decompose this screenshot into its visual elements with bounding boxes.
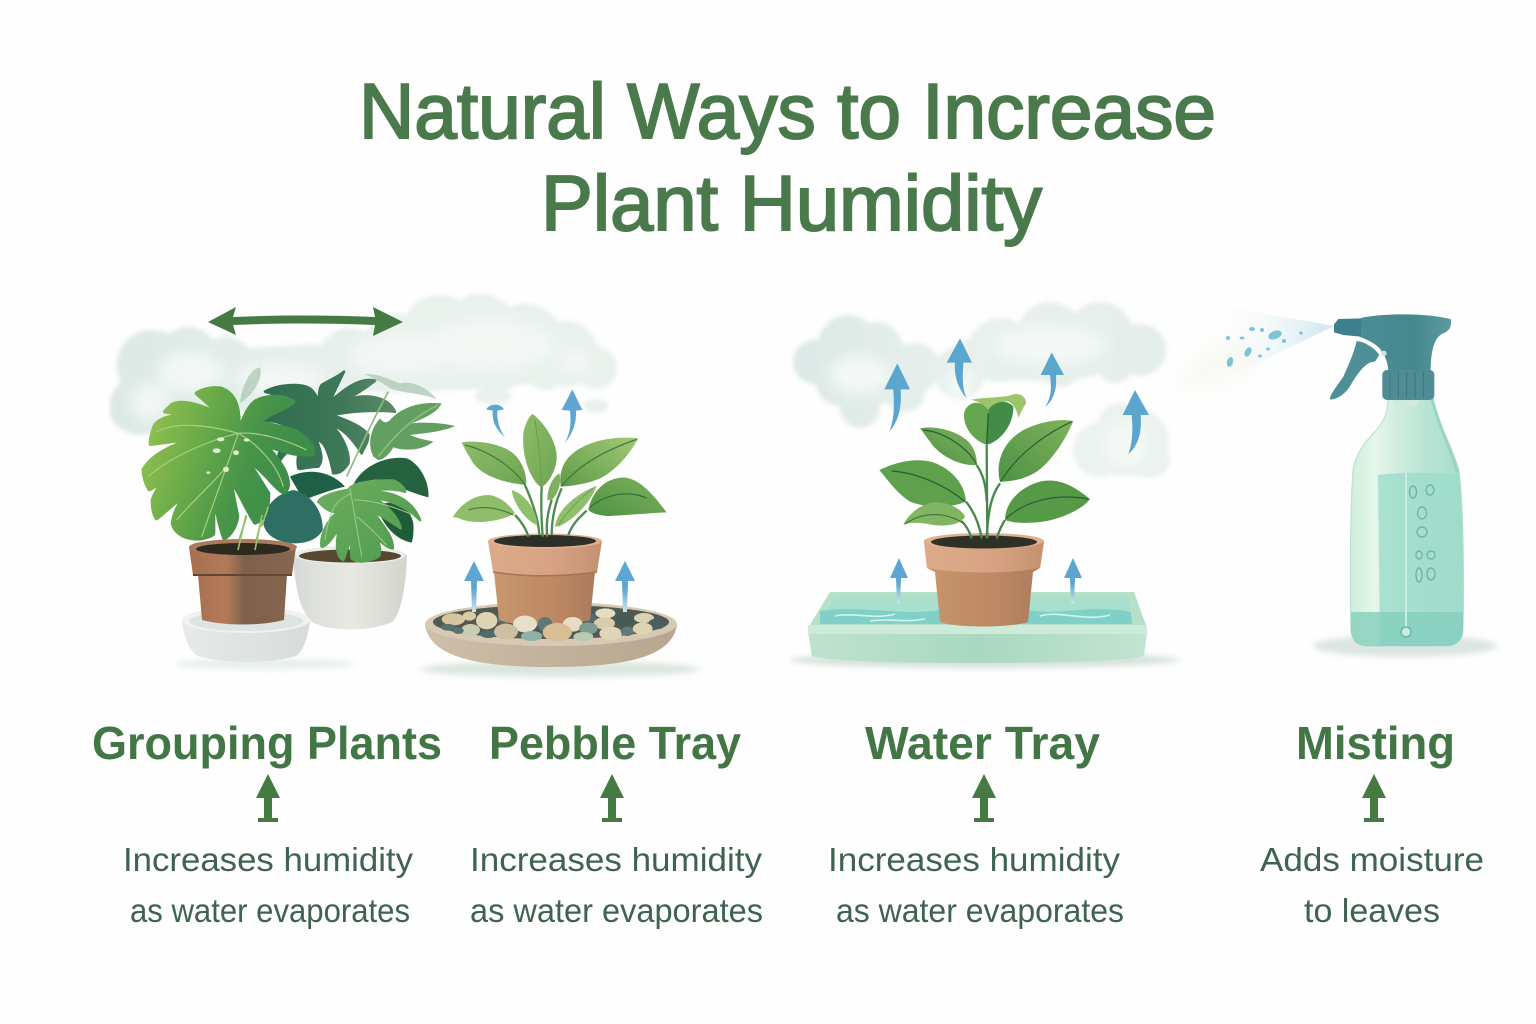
terracotta pot <box>924 533 1044 626</box>
tray <box>808 592 1147 663</box>
double arrow: grouping <box>208 307 403 336</box>
label: pebble tray: Pebble Tray <box>489 717 741 769</box>
label: water tray: Water Tray <box>865 717 1100 769</box>
dark right leaf <box>353 458 429 497</box>
pebble tray setup <box>420 389 700 677</box>
label: water tray: Increases humidity <box>828 841 1121 878</box>
spray bottle <box>1313 314 1497 657</box>
blue arrows above plant <box>884 338 1149 454</box>
cloud: grouping and pebble humidity <box>110 294 617 435</box>
mist haze <box>1180 339 1260 388</box>
bottle body <box>1350 398 1464 646</box>
spray head and trigger <box>1330 314 1451 407</box>
label: misting: Adds moisture <box>1260 841 1484 878</box>
small blue arrows: water tray <box>890 558 1082 604</box>
plant leaves: pebble tray <box>453 414 667 537</box>
title: Natural Ways to Increase <box>359 67 1216 155</box>
pebbles back <box>442 608 665 629</box>
label: misting: to leaves <box>1304 892 1440 929</box>
concrete pot <box>293 546 407 630</box>
faded leaves <box>240 367 437 403</box>
pebbles front <box>441 612 653 642</box>
label: pebble tray: Increases humidity <box>470 841 763 878</box>
small blue arrows: pebble tray <box>464 561 635 612</box>
plant leaves: water tray <box>879 394 1090 538</box>
label: grouping plants: as water evaporates <box>130 892 410 929</box>
label: pebble tray <box>470 717 763 929</box>
label: grouping plants: Grouping Plants <box>92 717 442 769</box>
arrow up <box>972 774 996 822</box>
cloud: water tray humidity <box>793 302 1170 478</box>
teal round leaf <box>263 490 323 543</box>
back monstera leaf <box>262 372 395 473</box>
big monstera leaf <box>143 388 313 545</box>
arrow up <box>1362 774 1386 822</box>
monstera foliage <box>143 367 455 561</box>
blue arrows above plant <box>486 389 582 443</box>
front small monstera leaf <box>318 481 420 561</box>
title <box>359 67 1216 247</box>
right palm leaf <box>370 403 455 460</box>
label: grouping plants <box>92 717 442 929</box>
spray mist <box>1222 306 1334 378</box>
title: Plant Humidity <box>541 159 1042 247</box>
plant group: grouping plants <box>143 367 455 662</box>
label: water tray: as water evaporates <box>836 892 1124 929</box>
label: water tray <box>828 717 1124 929</box>
arrow up <box>256 774 280 822</box>
bottle bubbles <box>1410 485 1435 582</box>
label: pebble tray: as water evaporates <box>470 892 763 929</box>
dark upper leaf <box>290 472 345 500</box>
label: misting: Misting <box>1296 717 1455 769</box>
terracotta pot <box>488 534 602 626</box>
label: grouping plants: Increases humidity <box>123 841 414 878</box>
ground shadow: grouping <box>175 659 355 669</box>
label: misting <box>1260 717 1484 929</box>
terracotta pot <box>189 515 297 624</box>
white saucer bowl <box>182 607 310 662</box>
arrow up <box>600 774 624 822</box>
water tray setup <box>790 338 1180 668</box>
tray <box>425 602 677 667</box>
